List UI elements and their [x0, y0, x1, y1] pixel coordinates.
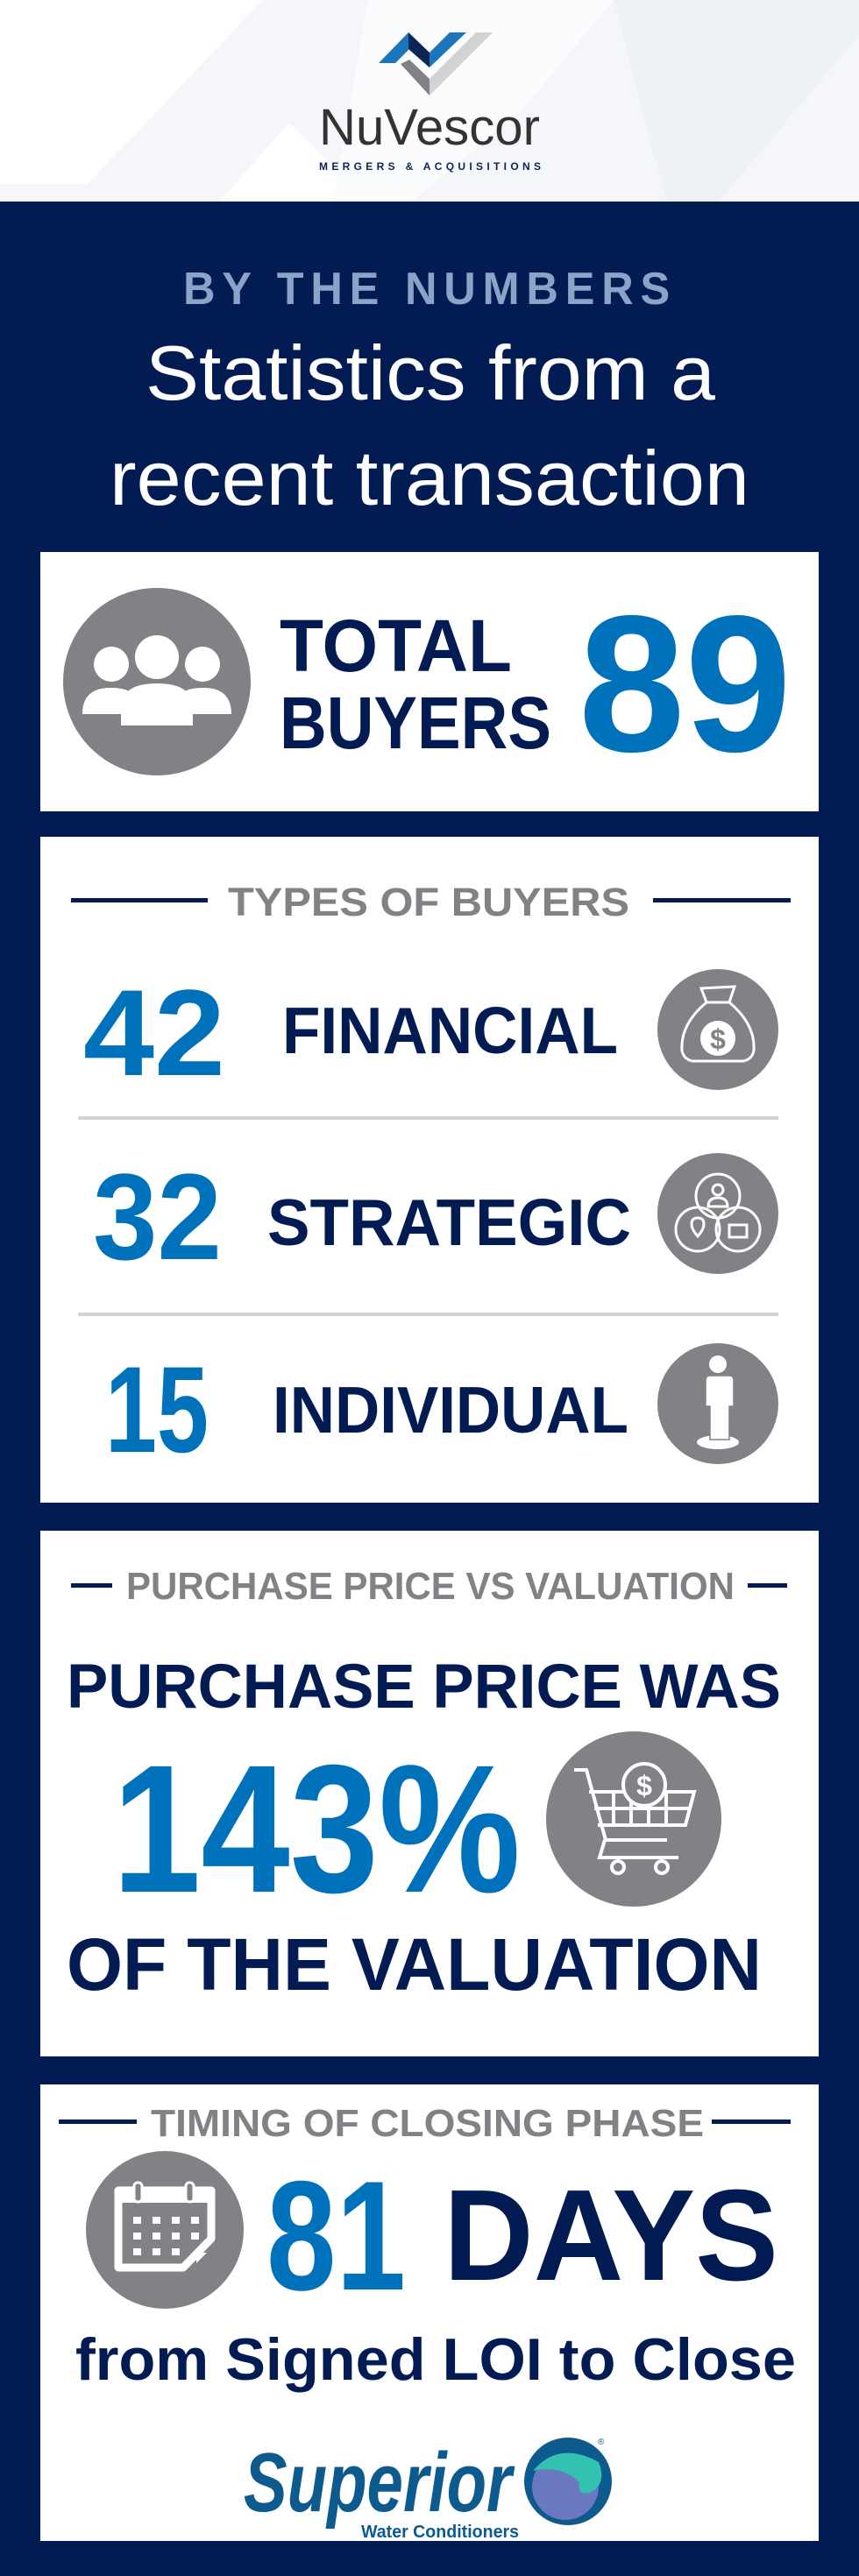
label: total buyers: BUYERS	[280, 682, 551, 764]
number: 81 days: 81	[266, 2148, 406, 2323]
panel: total buyers	[40, 552, 819, 811]
heading: types of buyers	[71, 880, 791, 924]
title: Statistics from a	[146, 329, 715, 416]
row: strategic: 32	[93, 1148, 222, 1285]
number: 89: 89	[579, 576, 792, 793]
label: total buyers	[280, 605, 551, 764]
row: strategic: STRATEGIC	[267, 1185, 631, 1259]
icon: cart with coin	[546, 1731, 721, 1907]
number: 143%: 143%	[112, 1728, 521, 1931]
logo: superior water conditioners: ®	[598, 2438, 605, 2447]
icon: calendar	[86, 2151, 244, 2309]
text: from signed loi to close: from Signed LOI to Close	[75, 2326, 796, 2393]
number: 81 days: DAYS	[444, 2163, 778, 2308]
panel: purchase price vs valuation	[40, 1531, 819, 2056]
logo: NuVescor	[319, 32, 541, 173]
heading: timing of closing phase: TIMING OF CLOSING PHASE	[151, 2102, 704, 2145]
text: of the valuation: OF THE VALUATION	[67, 1923, 762, 2006]
logo: superior water conditioners: Water Conditioners	[361, 2523, 519, 2542]
icon: network circles	[657, 1153, 778, 1274]
header background	[0, 0, 859, 202]
panel: timing of closing phase	[40, 2084, 819, 2542]
icon: people group	[63, 588, 251, 775]
row: financial: 42	[83, 964, 225, 1101]
row: individual: 15	[105, 1341, 209, 1478]
heading: types of buyers: TYPES OF BUYERS	[228, 880, 629, 924]
label: total buyers: TOTAL	[280, 605, 512, 687]
icon: money bag: $	[710, 1023, 726, 1055]
heading: purchase price vs valuation: PURCHASE PRICE VS VALUATION	[126, 1565, 735, 1608]
kicker: by the numbers: BY THE NUMBERS	[183, 264, 677, 315]
text: purchase price was: PURCHASE PRICE WAS	[67, 1652, 781, 1722]
row: strategic	[93, 1148, 778, 1285]
panel: types of buyers	[40, 837, 819, 1503]
row: individual	[105, 1341, 778, 1478]
row: individual: INDIVIDUAL	[273, 1373, 628, 1447]
title	[110, 329, 749, 521]
icon: cart with coin: $	[636, 1770, 652, 1801]
logo: superior water conditioners: Superior	[244, 2436, 515, 2530]
logo: NuVescor: NuVescor	[319, 99, 540, 156]
icon: money bag	[657, 969, 778, 1090]
row: financial: FINANCIAL	[282, 994, 618, 1067]
icon: person	[657, 1343, 778, 1464]
number: 81 days	[266, 2148, 778, 2323]
title: recent transaction	[110, 435, 749, 521]
row: financial	[83, 964, 778, 1101]
logo: NuVescor: MERGERS & ACQUISITIONS	[319, 160, 541, 173]
